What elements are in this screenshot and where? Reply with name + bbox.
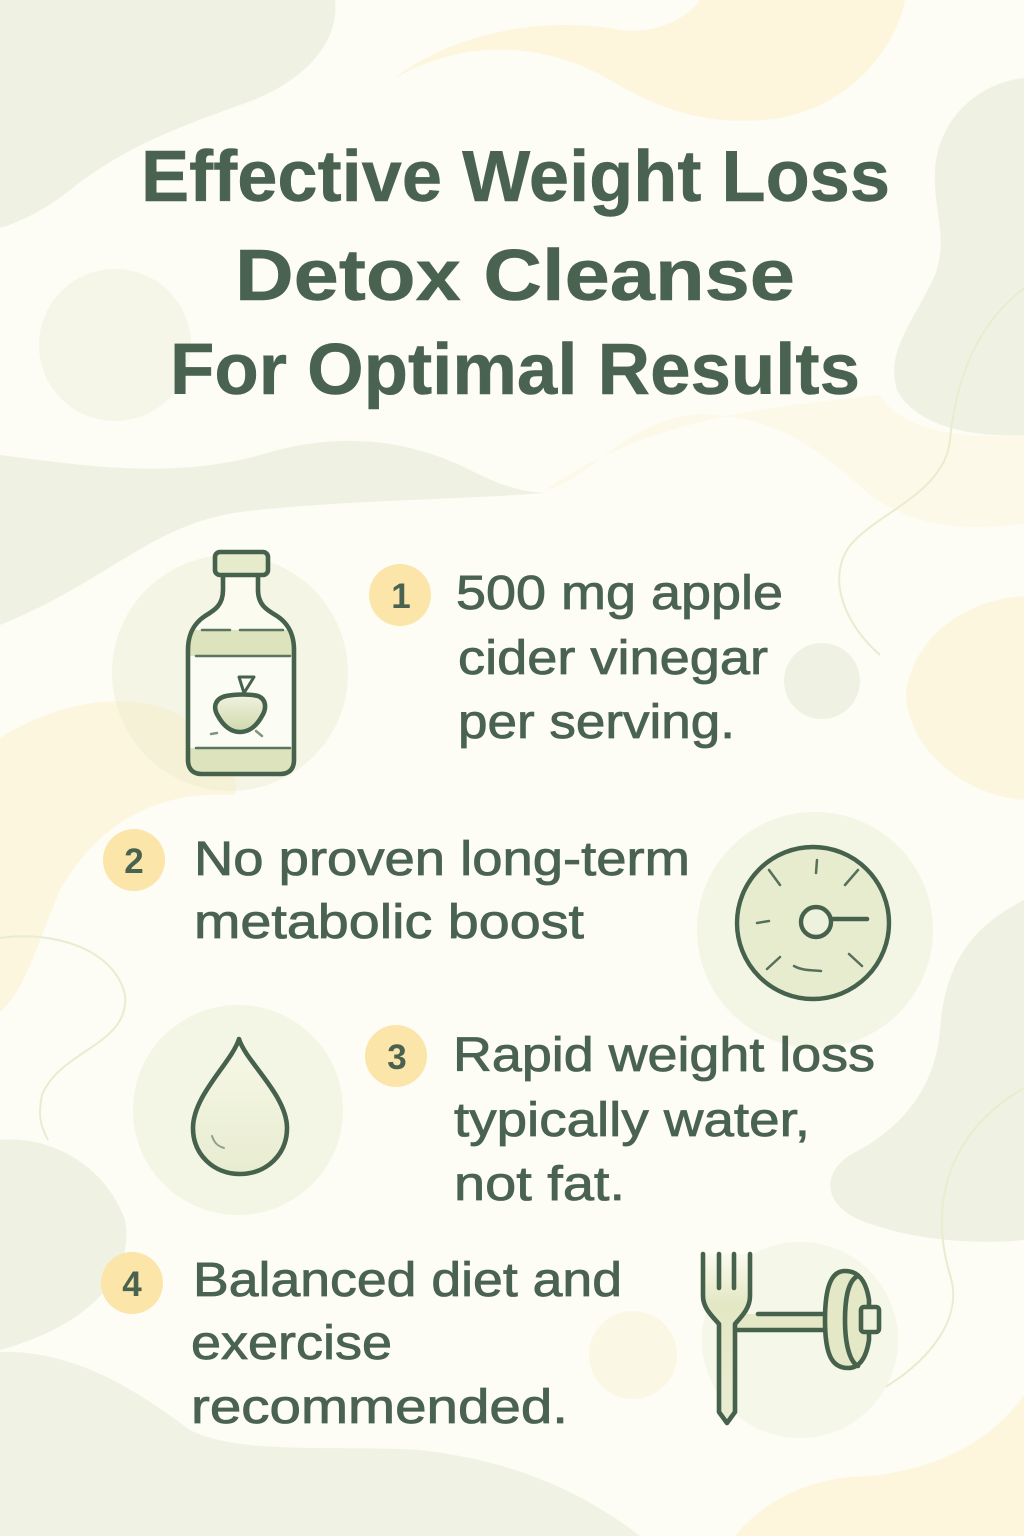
text: point 2: No proven long-term (194, 833, 690, 886)
badge 3: 3 (387, 1038, 407, 1077)
text: point 3: typically water, (454, 1094, 810, 1147)
title: For Optimal Results (170, 330, 860, 410)
text: point 3 (453, 1029, 875, 1211)
icon: fork and dumbbell (703, 1254, 879, 1423)
text: point 4: Balanced diet and (193, 1254, 622, 1307)
text: point 1: per serving. (458, 696, 735, 749)
text: point 3: Rapid weight loss (453, 1029, 875, 1082)
badge 2: 2 (124, 842, 144, 881)
text: point 2 (194, 833, 690, 949)
text: point 1: cider vinegar (458, 632, 768, 685)
text: point 2: metabolic boost (194, 896, 584, 949)
text: point 3: not fat. (454, 1158, 625, 1211)
title: Effective Weight Loss (141, 137, 890, 217)
text: point 4: recommended. (191, 1381, 568, 1434)
icon: water drop (193, 1039, 287, 1174)
text: point 1: 500 mg apple (456, 567, 783, 620)
badge 4: 4 (122, 1265, 142, 1304)
title: Detox Cleanse (235, 236, 795, 316)
icon: metabolism gauge (737, 847, 889, 999)
icon: apple cider vinegar bottle (188, 552, 294, 774)
badge 3 (365, 1025, 427, 1087)
badge 1 (369, 564, 431, 626)
title (141, 137, 890, 410)
text: point 4: exercise (191, 1317, 392, 1370)
badge 2 (103, 829, 165, 891)
badge 4 (101, 1252, 163, 1314)
badge 1: 1 (391, 577, 411, 616)
text: point 1 (456, 567, 783, 749)
text: point 4 (191, 1254, 622, 1434)
